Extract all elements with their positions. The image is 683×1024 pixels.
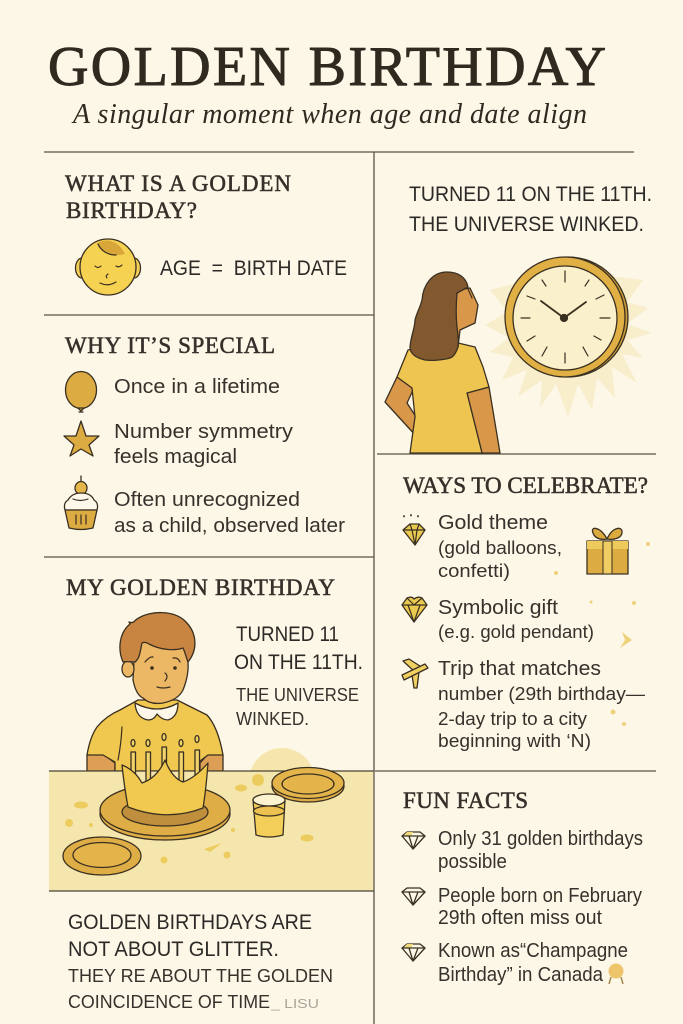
heading: what is a golden birthday: WHAT IS A GOLDEN bbox=[65, 171, 291, 196]
panel: my golden birthday bbox=[49, 575, 374, 891]
heading: what is a golden birthday: BIRTHDAY? bbox=[66, 198, 197, 223]
formula: age equals birth date: AGE = BIRTH DATE bbox=[160, 257, 347, 280]
panel: closing statement: THEY RE ABOUT THE GOLDEN bbox=[68, 965, 333, 986]
panel: why it's special bbox=[64, 333, 345, 537]
panel: ways to celebrate bbox=[402, 473, 650, 751]
text: fact 3 bbox=[438, 939, 628, 986]
icon: star bbox=[64, 421, 99, 456]
crown cake bbox=[122, 760, 208, 815]
text: number symmetry: Number symmetry bbox=[114, 420, 294, 443]
left plate bbox=[63, 837, 141, 875]
text: fact 1: possible bbox=[438, 850, 507, 873]
heading: ways to celebrate: WAYS TO CELEBRATE? bbox=[403, 473, 648, 498]
glass of juice bbox=[253, 794, 285, 837]
icon: gift box bbox=[587, 528, 628, 574]
woman from behind bbox=[385, 272, 500, 453]
text: gold theme: confetti) bbox=[438, 560, 510, 581]
text: often unrecognized: as a child, observed later bbox=[114, 514, 345, 537]
icon: airplane bbox=[402, 659, 428, 688]
panel: clock story bbox=[385, 183, 652, 453]
sun glow bbox=[249, 748, 315, 814]
text: fact 3: Known as“Champagne bbox=[438, 939, 628, 962]
text: trip that matches bbox=[438, 657, 646, 751]
icon: balloon bbox=[66, 372, 96, 412]
text: fact 2 bbox=[438, 884, 643, 929]
text: symbolic gift: (e.g. gold pendant) bbox=[438, 621, 594, 642]
title: GOLDEN BIRTHDAY bbox=[48, 36, 606, 98]
text: fact 2: 29th often miss out bbox=[438, 906, 602, 929]
text: trip that matches: beginning with ‘N) bbox=[438, 730, 591, 751]
text: number symmetry: feels magical bbox=[114, 445, 237, 468]
icon: baby face bbox=[76, 239, 140, 295]
heading: fun facts: FUN FACTS bbox=[403, 788, 528, 813]
confetti bbox=[65, 774, 314, 864]
text: gold theme: (gold balloons, bbox=[438, 537, 562, 558]
icon: diamond 3 bbox=[402, 944, 425, 961]
icon: gold gem bbox=[403, 515, 425, 545]
text: fact 3: Birthday” in Canada bbox=[438, 963, 604, 986]
candles bbox=[131, 734, 200, 788]
text: often unrecognized bbox=[114, 488, 345, 537]
confetti bbox=[554, 542, 650, 726]
panel: closing statement: COINCIDENCE OF TIME bbox=[68, 991, 270, 1012]
icon: cupcake bbox=[64, 476, 98, 530]
heading: my golden birthday: MY GOLDEN BIRTHDAY bbox=[66, 575, 335, 600]
text: once in a lifetime: Once in a lifetime bbox=[114, 375, 280, 398]
icon: symbolic gift diamond bbox=[402, 597, 427, 622]
clock sunburst bbox=[485, 270, 652, 417]
boy bbox=[87, 613, 223, 771]
right plate bbox=[272, 768, 344, 802]
text: symbolic gift: Symbolic gift bbox=[438, 596, 558, 619]
icon: diamond 1 bbox=[402, 832, 425, 849]
subtitle: A singular moment when age and date align bbox=[71, 99, 587, 130]
text: turned 11 on the 11th: WINKED. bbox=[236, 708, 309, 729]
text: turned 11 on the 11th: ON THE 11TH. bbox=[234, 651, 363, 674]
text: turned 11 on the 11th bbox=[234, 623, 363, 729]
panel: fun facts bbox=[402, 788, 643, 986]
panel: closing statement bbox=[68, 911, 333, 1012]
text: symbolic gift bbox=[438, 596, 594, 642]
illustration: table scene with boy and crown cake bbox=[49, 613, 374, 891]
icon: diamond 2 bbox=[402, 888, 425, 905]
text: turned 11 on the 11th: THE UNIVERSE WINKED. bbox=[409, 213, 644, 236]
cake plate bbox=[100, 784, 230, 840]
text: turned 11 on the 11th: THE UNIVERSE bbox=[236, 684, 359, 705]
text: trip that matches: number (29th birthday— bbox=[438, 683, 646, 704]
text: turned 11 on the 11th: TURNED 11 ON THE 11TH. bbox=[409, 183, 652, 206]
text: fact 1: Only 31 golden birthdays bbox=[438, 827, 643, 850]
table bbox=[49, 771, 373, 891]
panel: closing statement: NOT ABOUT GLITTER. bbox=[68, 938, 279, 961]
panel: what is a golden birthday bbox=[65, 171, 347, 295]
text: trip that matches: 2-day trip to a city bbox=[438, 708, 588, 729]
text: gold theme bbox=[438, 511, 562, 581]
text: often unrecognized: Often unrecognized bbox=[114, 488, 300, 511]
text: turned 11 on the 11th: TURNED 11 bbox=[236, 623, 339, 646]
text: fact 1 bbox=[438, 827, 643, 873]
text: turned 11 on the 11th bbox=[409, 183, 652, 236]
clock bbox=[505, 257, 628, 377]
heading: why it's special: WHY IT’S SPECIAL bbox=[65, 333, 275, 358]
heading: what is a golden birthday bbox=[65, 171, 291, 223]
text: gold theme: Gold theme bbox=[438, 511, 548, 534]
panel: closing statement: GOLDEN BIRTHDAYS ARE bbox=[68, 911, 312, 934]
icon: champagne medal bbox=[608, 964, 624, 984]
panel: closing statement: _ LISU bbox=[270, 996, 319, 1011]
text: trip that matches: Trip that matches bbox=[438, 657, 601, 680]
text: fact 2: People born on February bbox=[438, 884, 643, 907]
text: number symmetry bbox=[114, 420, 294, 468]
